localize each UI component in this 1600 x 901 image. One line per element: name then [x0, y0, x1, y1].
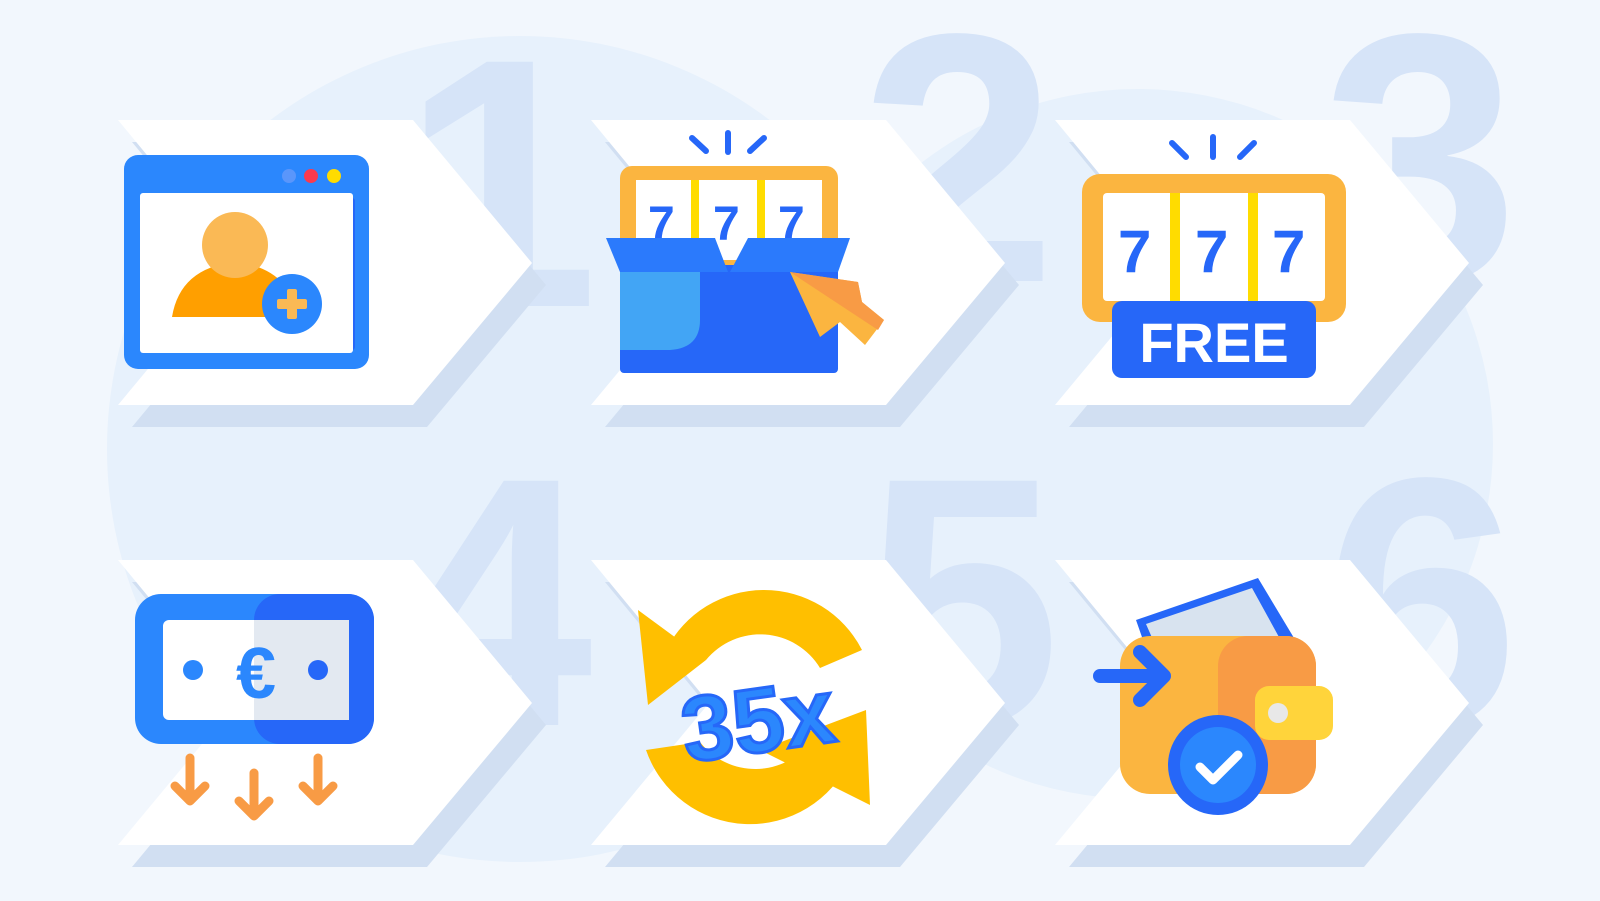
big step numbers — [395, 0, 1520, 801]
panel 1: register — [118, 120, 546, 427]
icon: slot with FREE: 7 — [1118, 218, 1151, 285]
icon: cycle arrows with 35x — [638, 590, 870, 824]
background circles — [107, 36, 1493, 862]
panel 6: wallet withdraw — [1055, 560, 1483, 867]
icon: slot box with cursor: 7 — [648, 198, 675, 251]
icon: slot box with cursor: 7 — [713, 198, 740, 251]
icon: slot box with cursor: 7 — [778, 198, 805, 251]
panel 3: free spins — [1055, 120, 1483, 427]
icon: slot box with cursor — [606, 133, 884, 373]
big step numbers: 6 — [1322, 405, 1520, 801]
panel 5: wagering 35x — [591, 560, 1019, 867]
big step numbers: 4 — [395, 405, 595, 801]
panel 4: money out — [118, 560, 546, 867]
icon: slot with FREE — [1082, 137, 1346, 378]
icon: banknote with arrows: € — [236, 634, 276, 714]
icon: wallet with check — [1100, 578, 1333, 815]
panel 2: deposit box — [591, 120, 1019, 427]
icon: slot with FREE: 7 — [1272, 218, 1305, 285]
big step numbers: 5 — [863, 405, 1061, 801]
icon: slot with FREE: FREE — [1139, 311, 1289, 374]
icon: cycle arrows with 35x: 35x — [675, 660, 841, 782]
icon: browser with user add — [124, 155, 369, 369]
icon: banknote with arrows — [135, 594, 374, 816]
icon: slot with FREE: 7 — [1195, 218, 1228, 285]
